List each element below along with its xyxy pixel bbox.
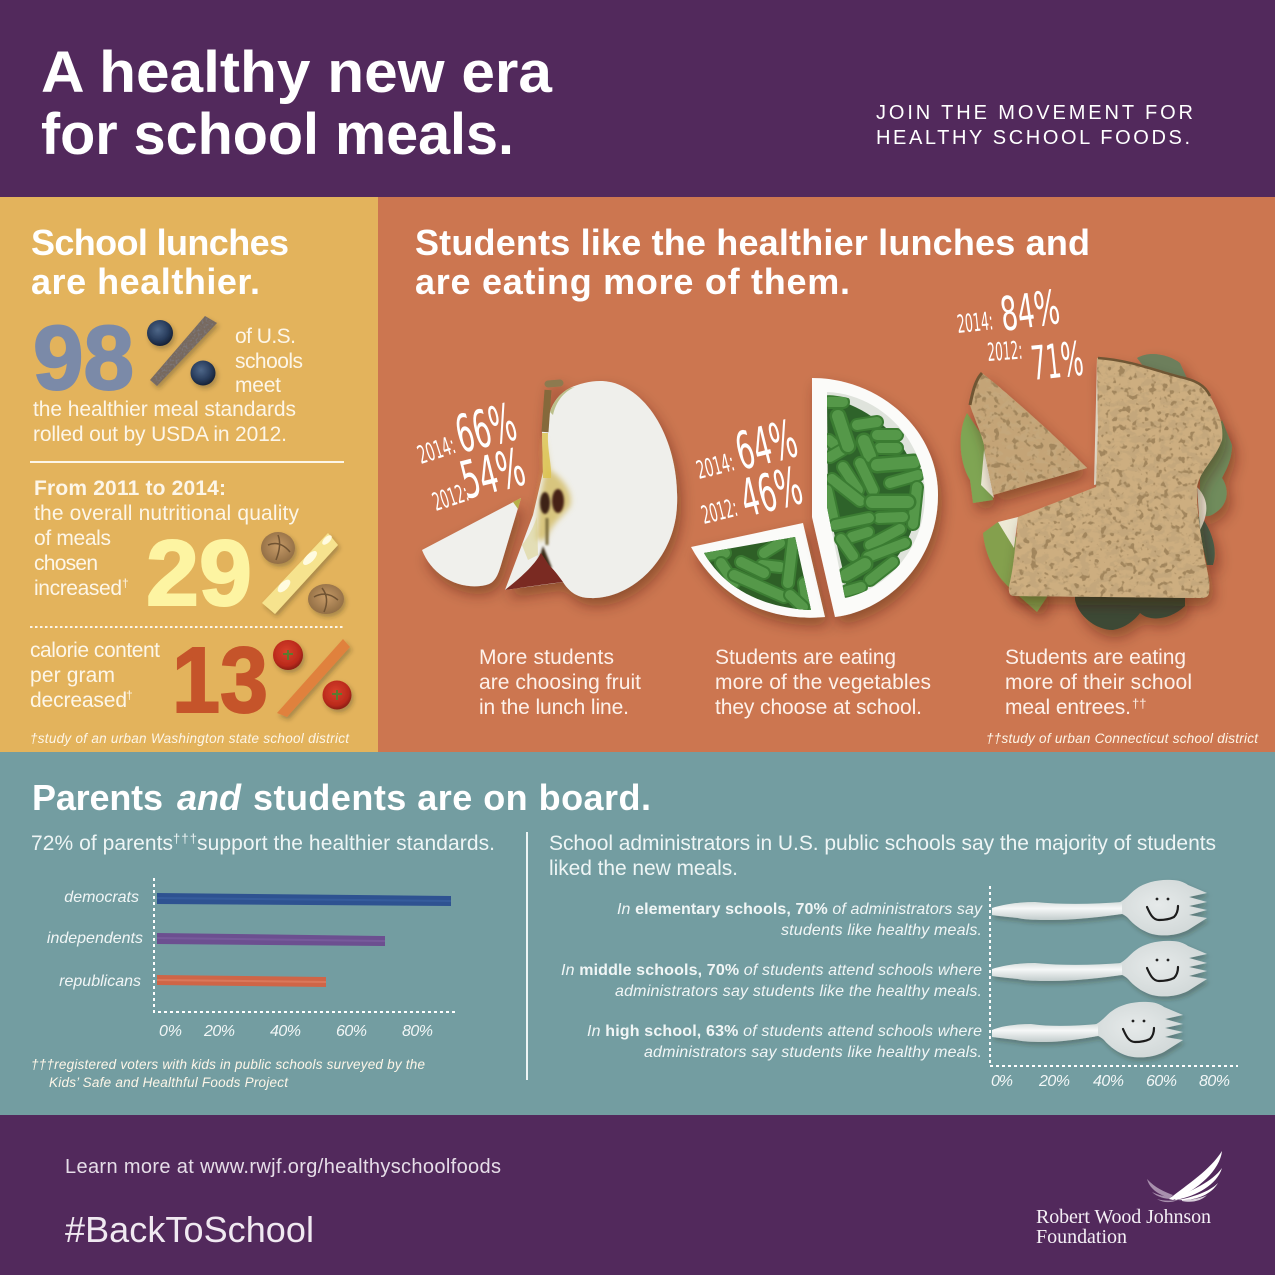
axis labels: 20% [1038,1073,1070,1090]
learn more link: Learn more at www.rwjf.org/healthyschoolfoods [65,1156,501,1178]
text: nutritional quality: increased [34,577,122,600]
hashtag: #BackToSchool [65,1209,314,1250]
small bowl [691,523,825,618]
axis labels: 40% [1093,1073,1124,1090]
row: elementary schools: In elementary schools, 70% of administrators say [617,901,983,918]
apple percentages: 54% [455,438,531,512]
icon: percent sign of tomatoes and carrot [273,639,352,717]
icon: smiling spork [992,941,1207,996]
large bowl [812,378,938,617]
chart: administrators by school level [561,880,1238,1090]
bar: republicans [59,973,326,990]
axis labels: 80% [402,1023,433,1040]
apple body [505,381,677,598]
caption: fruit [479,646,641,719]
text: parents support: ††† [173,831,197,846]
caption: vegetables: more of the vegetables [715,671,931,694]
axis labels: 0% [991,1073,1013,1090]
panel: school lunches are healthier [0,197,378,752]
text: nutritional quality: of meals [34,527,111,550]
icon: smiling spork [992,880,1207,935]
stat: 98 percent: 98 [33,308,134,409]
text: calorie content: † [126,688,133,702]
caption: fruit: in the lunch line. [479,696,629,719]
text: nutritional quality: the overall nutritional quality [34,502,300,525]
apple percentages [414,393,531,517]
apple percentages: 2012: [429,478,472,517]
text: administrators: liked the new meals. [549,857,738,880]
footnote [31,1057,425,1090]
lettuce [961,354,1232,630]
text: nutritional quality: † [122,576,129,590]
text: calorie content: decreased [30,689,127,712]
tagline [876,102,1193,149]
sandwich percentages: 84% [997,280,1063,343]
row: middle schools: administrators say students like the healthy meals. [615,983,982,1000]
apple slice [422,498,521,586]
caption: vegetables: they choose at school. [715,696,922,719]
text: nutritional quality [34,477,300,600]
icon: percent sign of rolls and cheese [261,532,344,614]
bar: independents [47,930,385,947]
caption: entrees: †† [1132,696,1146,711]
text: 98 percent description: the healthier meal standards [33,398,296,421]
panel heading: Parents [32,777,163,818]
pie: apple [414,381,677,598]
footnote: †study of an urban Washington state school district [30,731,350,746]
bar: independents: independents [47,930,143,947]
text: nutritional quality: From 2011 to 2014: [34,477,226,500]
header band [0,0,1275,197]
icon: smiling spork [992,1002,1183,1057]
row: middle schools [561,941,1207,1000]
footnote: ††study of urban Connecticut school district [986,731,1259,746]
chart axes [990,886,1238,1066]
axis labels: 20% [203,1023,235,1040]
panel heading [415,222,1090,302]
text: calorie content: per gram [30,664,115,687]
caption: vegetables: Students are eating [715,646,896,669]
panel heading: are eating more of them. [415,261,850,302]
stat: 13 percent: 13 [172,628,268,732]
stat: 29 percent: 29 [146,521,252,625]
logo: Robert Wood Johnson Foundation: Robert Wood Johnson [1036,1206,1211,1228]
panel heading [32,777,651,818]
caption: entrees [1005,646,1192,719]
title: for school meals. [41,102,514,167]
bar: democrats [64,889,451,906]
title: A healthy new era [41,40,553,105]
apple core [505,433,571,590]
footnote: †††registered voters with kids in public schools surveyed by the [31,1057,425,1072]
text: 98 percent description: rolled out by USDA in 2012. [33,423,287,446]
text: 98 percent description: meet [235,374,281,397]
bar: democrats: democrats [64,889,139,906]
row: elementary schools [617,880,1207,939]
text: 98 percent description: schools [235,350,303,373]
text: parents support [31,831,495,855]
icon: wing [1147,1151,1222,1202]
sandwich bread [970,358,1222,598]
axis labels: 60% [336,1023,367,1040]
sandwich percentages: 2012: [986,336,1023,367]
row: middle schools: In middle schools, 70% of students attend schools where [561,962,982,979]
panel: students like the healthier lunches [378,197,1275,752]
caption: fruit: More students [479,646,614,669]
text: 98 percent description: of U.S. [235,325,296,348]
panel: parents and students on board [0,752,1275,1115]
chart: support by party [47,878,457,1040]
caption: entrees: Students are eating [1005,646,1186,669]
row: high school [587,1002,1183,1061]
apple percentages: 66% [450,393,522,466]
bean percentages: 64% [730,410,803,483]
bean percentages [693,410,808,530]
row: elementary schools: students like healthy meals. [781,922,982,939]
row: high school: administrators say students like healthy meals. [644,1044,982,1061]
text: administrators: School administrators in U.S. public schools say the majority of students [549,832,1216,855]
text: administrators [549,832,1216,880]
sandwich percentages [956,280,1086,392]
panel heading: Students like the healthier lunches and [415,222,1090,263]
bean percentages: 46% [735,457,808,530]
panel heading: and [177,777,242,818]
caption: entrees: meal entrees. [1005,696,1131,719]
axis labels: 80% [1199,1073,1230,1090]
panel heading: are healthier. [31,261,260,302]
text: calorie content: calorie content [30,639,160,662]
pie: sandwich [956,280,1232,630]
caption: entrees: more of their school [1005,671,1192,694]
bar: republicans: republicans [59,973,141,990]
axis labels [159,1023,433,1040]
row: high school: In high school, 63% of students attend schools where [587,1023,982,1040]
pie: green beans bowl [691,378,938,618]
text: parents support: 72% of parents [31,832,173,855]
panel heading [31,222,289,302]
axis labels [991,1073,1230,1090]
logo: Robert Wood Johnson Foundation [1036,1151,1222,1248]
logo: Robert Wood Johnson Foundation: Foundation [1036,1226,1127,1248]
axis labels: 60% [1146,1073,1177,1090]
icon: percent sign of blueberries and granola bar [147,316,217,386]
text: nutritional quality: chosen [34,552,98,575]
panel heading: School lunches [31,222,289,263]
tagline: JOIN THE MOVEMENT FOR [876,102,1193,124]
tagline: HEALTHY SCHOOL FOODS. [876,127,1190,149]
sandwich percentages: 2014: [956,306,994,339]
sandwich percentages: 71% [1029,332,1086,392]
axis labels: 0% [159,1023,182,1040]
title [41,40,553,167]
axis labels: 40% [270,1023,301,1040]
bean percentages: 2014: [693,447,737,485]
apple percentages: 2014: [414,430,459,470]
caption: fruit: are choosing fruit [479,671,641,694]
footer band [0,1115,1275,1275]
caption: vegetables [715,646,931,719]
panel heading: students are on board. [253,777,651,818]
chart axes [154,878,457,1012]
text: 98 percent description [33,325,303,446]
footnote: Kids’ Safe and Healthful Foods Project [49,1075,289,1090]
text: parents support: support the healthier standards. [197,832,495,855]
bean percentages: 2012: [698,493,740,530]
text: calorie content [30,639,160,712]
